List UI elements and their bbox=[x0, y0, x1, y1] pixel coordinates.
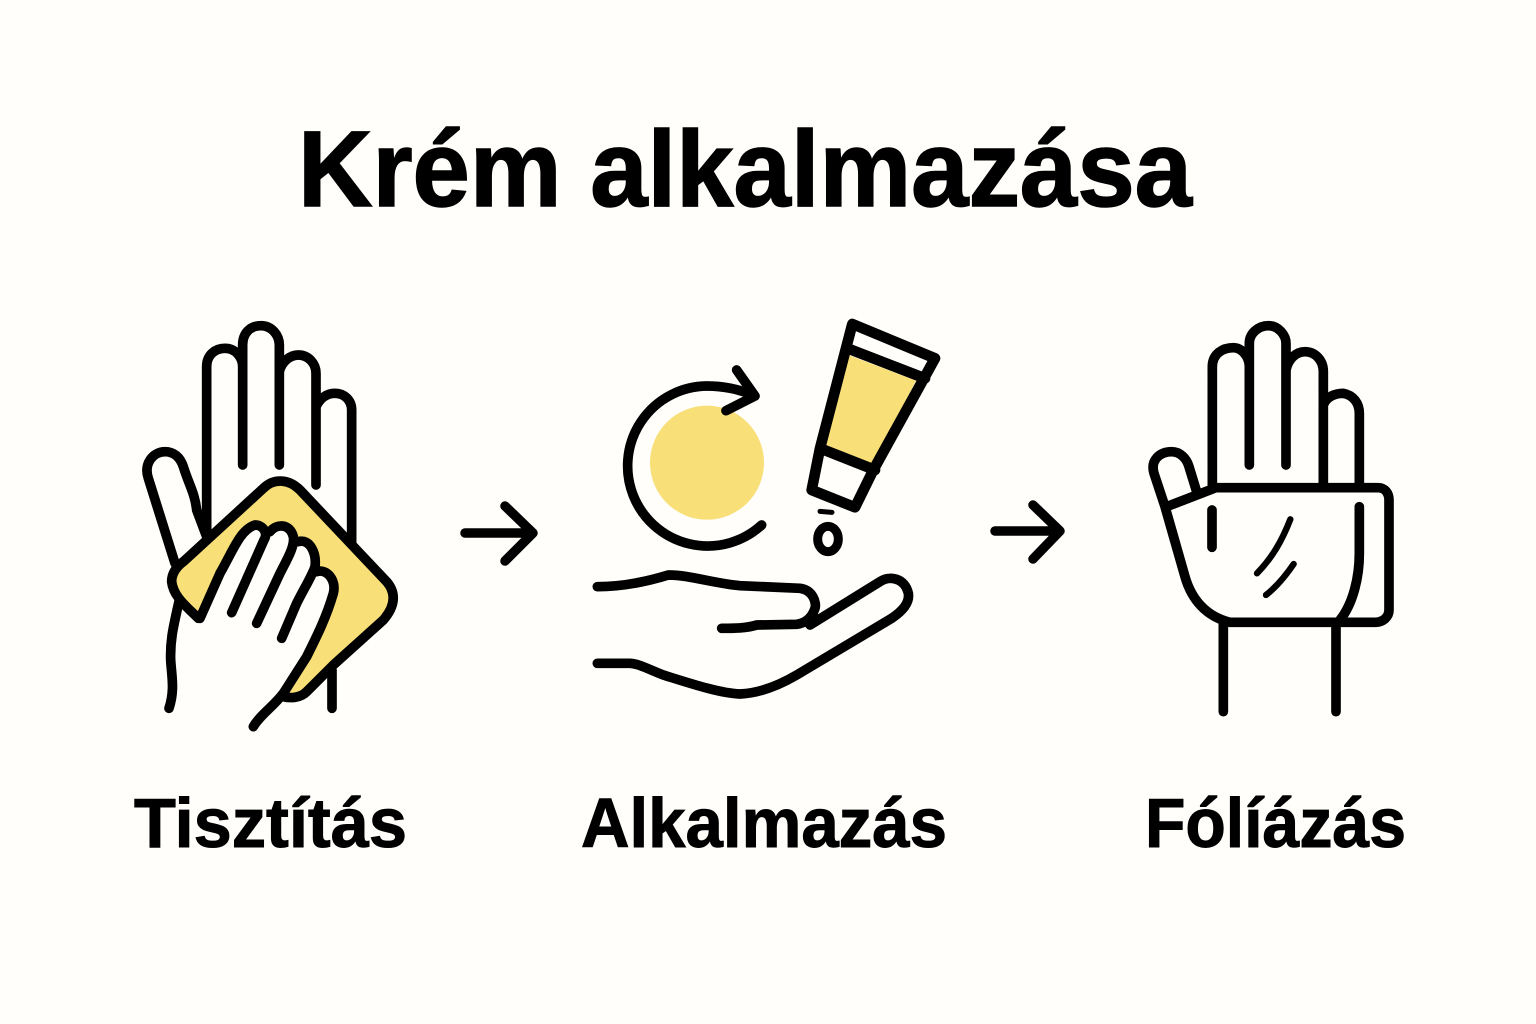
open hand bbox=[597, 575, 909, 694]
arrow: step 1 to step 2 bbox=[465, 506, 533, 561]
circular motion arrow bbox=[628, 370, 762, 546]
label: Alkalmazás: Alkalmazás bbox=[581, 784, 947, 862]
wrist bbox=[1223, 623, 1336, 712]
back hand fingers bbox=[207, 326, 352, 543]
title: Krém alkalmazása bbox=[298, 108, 1193, 229]
foil wrap and thumb bbox=[1153, 452, 1389, 622]
icon: cleaning hand with cloth bbox=[147, 326, 393, 727]
cloth fill bbox=[172, 481, 393, 698]
front hand fingers bbox=[200, 525, 334, 727]
front hand fill bbox=[193, 525, 334, 710]
cream drop bbox=[818, 511, 838, 552]
foil highlights bbox=[1257, 519, 1294, 595]
cloth outline bbox=[172, 481, 393, 698]
label: Tisztítás: Tisztítás bbox=[134, 784, 407, 862]
fingers bbox=[1212, 326, 1359, 485]
cream blob bbox=[650, 406, 764, 520]
back hand thumb and wrist bbox=[147, 452, 332, 708]
icon: hand wrapped in foil bbox=[1153, 326, 1389, 712]
icon: applying cream bbox=[597, 324, 935, 694]
tube bbox=[812, 324, 935, 507]
arrow: step 2 to step 3 bbox=[995, 505, 1060, 559]
label: Fólíázás: Fólíázás bbox=[1145, 784, 1406, 862]
foil fold and marks bbox=[1212, 507, 1359, 620]
